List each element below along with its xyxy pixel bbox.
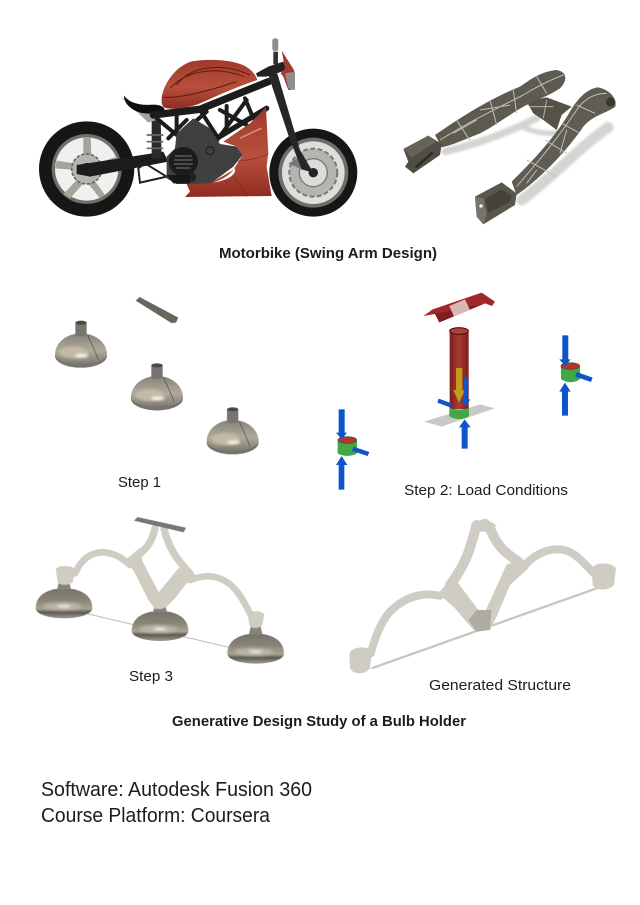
image: step 3 assembly <box>36 517 284 664</box>
ground shadow <box>372 588 597 668</box>
image: generated structure <box>349 518 616 673</box>
image: motorbike <box>39 38 357 217</box>
trellis frame <box>153 82 268 138</box>
bulb 2 <box>131 363 183 410</box>
green base <box>449 407 469 419</box>
cross member <box>527 97 572 130</box>
connecting line <box>88 614 230 648</box>
structure <box>56 528 264 628</box>
right arm <box>475 87 616 224</box>
inner shading <box>468 610 492 632</box>
image: load conditions <box>336 293 593 490</box>
front wheel <box>269 129 357 217</box>
seat and subframe <box>121 95 165 123</box>
software and platform text: Software: Autodesk Fusion 360 <box>41 779 312 801</box>
left arm <box>403 70 565 173</box>
blue arrows centre <box>437 377 471 449</box>
structure body <box>349 518 616 673</box>
front fork and headlight <box>256 38 313 173</box>
label: step 3: Step 3 <box>129 668 173 685</box>
bulbs <box>36 580 284 664</box>
bulb 3 <box>207 407 259 454</box>
top plate <box>134 517 186 532</box>
swing arm and shock <box>77 119 168 183</box>
software and platform text <box>41 779 312 827</box>
plate <box>136 297 178 323</box>
fuel tank <box>162 60 257 109</box>
ground plate <box>424 404 495 427</box>
heading: bulb holder: Generative Design Study of a Bulb Holder <box>172 713 466 730</box>
right fixture <box>559 335 593 416</box>
label: step 2: Step 2: Load Conditions <box>404 482 568 499</box>
fairing <box>185 107 272 197</box>
red cylinder <box>450 328 469 409</box>
image: step 1 parts <box>55 297 259 454</box>
label: generated structure: Generated Structure <box>429 677 571 694</box>
rear wheel <box>39 121 134 217</box>
image: swing arm <box>403 70 616 224</box>
bulb 1 <box>55 321 107 368</box>
heading: motorbike: Motorbike (Swing Arm Design) <box>219 245 437 262</box>
yellow arrow <box>453 368 465 403</box>
left fixture <box>336 409 369 490</box>
red cap <box>423 293 495 322</box>
engine <box>167 118 243 184</box>
label: step 1: Step 1 <box>118 474 161 491</box>
arm shadow <box>445 118 608 200</box>
software and platform text: Course Platform: Coursera <box>41 805 271 827</box>
